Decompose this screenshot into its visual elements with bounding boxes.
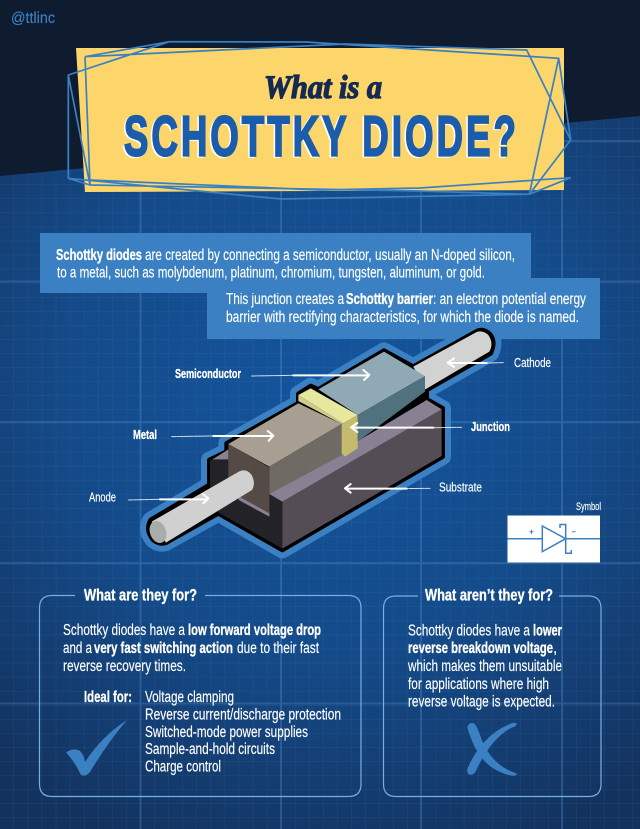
body text: limits: for applications where high	[408, 676, 549, 693]
body text: limits: reverse breakdown voltage	[408, 640, 553, 657]
dark top band	[0, 0, 640, 176]
body text: limits: Schottky diodes have a	[408, 622, 530, 640]
ideal for list: Switched-mode power supplies	[145, 724, 308, 741]
body text: uses: and a	[63, 640, 92, 657]
metal block	[228, 403, 345, 517]
title card	[68, 42, 571, 199]
panel: barrier: Schottky barrier	[346, 291, 433, 308]
ideal for list: Voltage clamping	[145, 689, 234, 706]
icon: check mark	[66, 720, 127, 776]
ideal for list: Charge control	[145, 758, 221, 776]
diode labels: Cathode	[514, 355, 551, 370]
ideal for list: Reverse current/discharge protection	[145, 706, 341, 724]
panel: definition: are created by connecting a semiconductor, usually an N-doped silicon,	[145, 247, 515, 264]
diode labels	[89, 355, 551, 504]
panel: barrier: : an electron potential energy	[433, 291, 586, 308]
anode lead	[147, 470, 254, 545]
semiconductor block	[318, 352, 425, 442]
body text: uses	[63, 622, 321, 675]
body text: limits	[407, 622, 562, 710]
panel: barrier: This junction creates a	[226, 291, 344, 308]
panel: definition: Schottky diodes	[56, 247, 142, 264]
diode labels: Semiconductor	[175, 366, 241, 381]
title: what is a: What is a	[264, 70, 382, 106]
heading: what are they for: What are they for?	[84, 586, 197, 604]
ideal for list: Ideal for:	[84, 689, 132, 706]
panel: definition: to a metal, such as molybdenum, platinum, chromium, tungsten, aluminum, or gold.	[57, 264, 485, 282]
body text: limits: lower	[533, 622, 562, 640]
diode labels: Junction	[471, 419, 510, 434]
body text: uses: very fast switching action	[94, 640, 233, 657]
body text: limits: ,	[553, 640, 557, 657]
heading: what aren't they for: What aren’t they for?	[425, 586, 553, 604]
body text: uses: reverse recovery times.	[63, 658, 186, 675]
body text: limits: which makes them unsuitable	[407, 658, 562, 675]
body text: uses: Schottky diodes have a	[63, 622, 185, 639]
cathode lead	[413, 331, 491, 389]
schottky symbol	[508, 501, 601, 562]
ideal for list	[84, 689, 341, 776]
panel: definition	[40, 233, 531, 293]
panel: what aren't they for	[384, 586, 601, 796]
icon: x mark	[467, 723, 517, 776]
diode labels: Anode	[89, 490, 116, 504]
panel: barrier	[207, 278, 600, 339]
callout arrows	[128, 358, 503, 503]
panel: what are they for	[40, 586, 361, 796]
junction layer	[298, 388, 358, 457]
diode labels: Metal	[133, 427, 157, 442]
schottky symbol: Symbol	[576, 501, 601, 513]
substrate	[210, 400, 442, 549]
diode illustration	[147, 330, 493, 550]
body text: limits: reverse voltage is expected.	[408, 694, 555, 710]
body text: uses: due to their fast	[237, 640, 320, 657]
ideal for list: Sample-and-hold circuits	[145, 741, 275, 758]
body text: uses: low forward voltage drop	[188, 622, 321, 639]
diode labels: Substrate	[439, 480, 482, 494]
brand handle: @ttlinc	[11, 10, 55, 27]
